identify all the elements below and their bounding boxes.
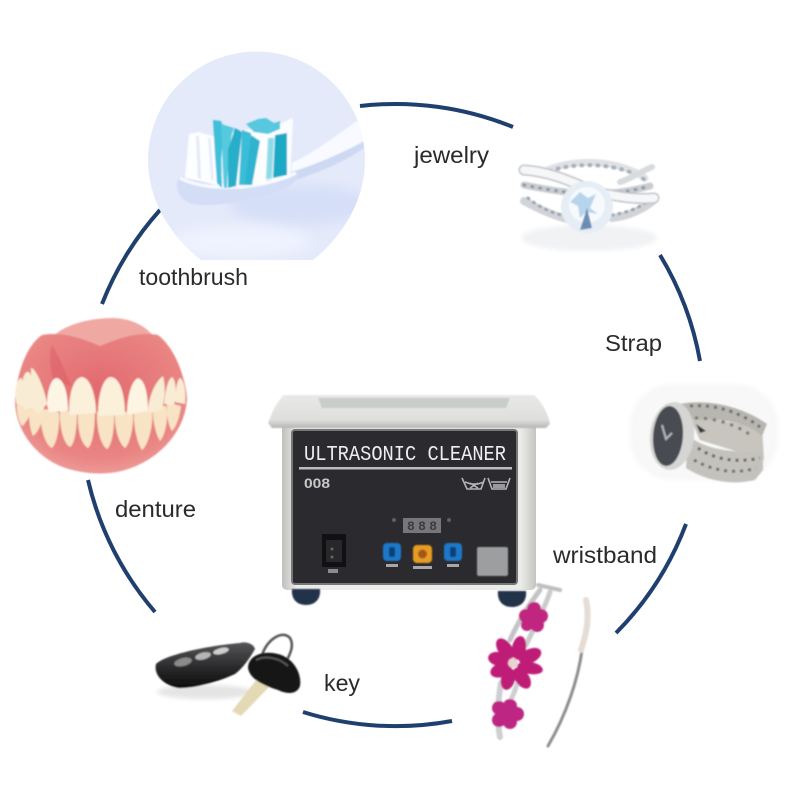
watch lower strap: [686, 436, 763, 482]
cleaner body: [282, 420, 536, 590]
key ring: [262, 635, 292, 660]
watch strap inner: [690, 418, 764, 460]
ring reflection: [521, 225, 657, 251]
arc: jewelry to strap: [660, 255, 700, 361]
model number: 008: [304, 475, 330, 491]
icon: car key: [156, 635, 300, 716]
blue button left: [383, 543, 401, 561]
arc: toothbrush to jewelry: [360, 104, 513, 127]
label: wristband: wristband: [552, 542, 657, 568]
orange button: [413, 545, 432, 563]
icon: watch photo: [630, 384, 778, 482]
arc: key to denture: [88, 480, 155, 612]
blue button right: [444, 543, 462, 561]
key head: [248, 653, 300, 693]
cleaner product name: ULTRASONIC CLEANER: [304, 444, 506, 467]
grey sticker: [477, 547, 508, 576]
pink flower top: [519, 602, 548, 632]
gums: [15, 334, 187, 473]
digital display: [392, 518, 451, 534]
remote fob: [156, 642, 255, 688]
key blade: [232, 675, 272, 716]
upper palate: [52, 318, 153, 346]
watch upper strap: [680, 402, 767, 436]
label: denture: denture: [115, 496, 196, 522]
cleaner lid: [268, 395, 550, 428]
icon: denture photo: [15, 318, 187, 473]
lower teeth: [17, 399, 181, 450]
key shadow: [157, 685, 253, 699]
ring bands: [524, 162, 654, 222]
arc: wristband to key: [303, 712, 452, 726]
watch dial: [651, 405, 685, 467]
icon: toothbrush photo: [148, 52, 365, 260]
power switch: [322, 534, 346, 573]
ring diamond: [561, 181, 613, 233]
arc: strap to wristband: [616, 524, 686, 633]
digital display: 888: [407, 519, 437, 534]
pink flower bottom: [492, 699, 524, 729]
watch case: [647, 400, 697, 472]
label: jewelry: jewelry: [413, 142, 490, 168]
arc: denture to toothbrush: [102, 210, 160, 304]
panel divider: [299, 467, 512, 470]
white bristles: [185, 132, 223, 186]
teal bristles: [213, 120, 224, 188]
upper teeth: [15, 368, 185, 416]
bracelet band: [498, 585, 588, 746]
icon: wristband bracelet: [487, 585, 588, 746]
label: toothbrush: toothbrush: [139, 264, 248, 290]
watch backdrop: [630, 384, 778, 480]
icon: ring photo: [521, 162, 657, 251]
icon: wash symbols: [462, 478, 510, 489]
toothbrush handle: [291, 120, 363, 172]
label: key: key: [324, 670, 360, 696]
toothbrush head: [177, 177, 294, 205]
label: strap: Strap: [605, 330, 662, 356]
pink flower middle: [487, 635, 544, 692]
button captions: [386, 564, 459, 569]
cycle arcs: [88, 104, 700, 726]
icon: ultrasonic cleaner: [268, 395, 550, 607]
control panel: [292, 430, 517, 584]
cleaner feet: [292, 589, 526, 607]
